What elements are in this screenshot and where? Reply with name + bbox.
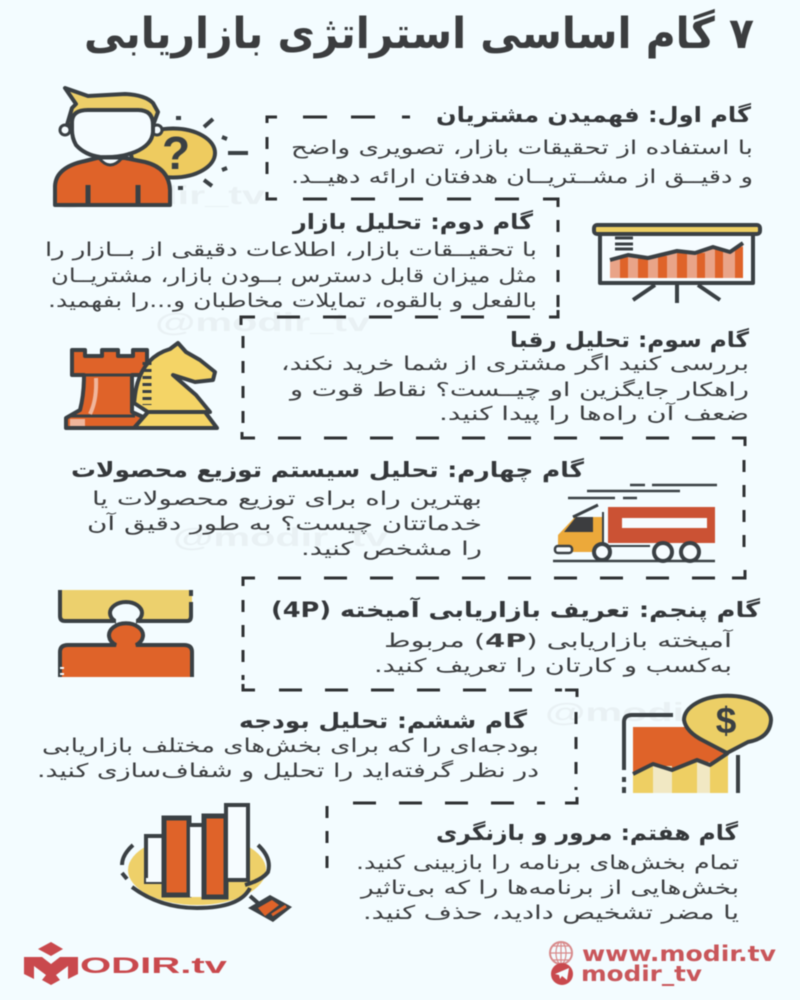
body: step 3: بررسی کنید اگر مشتری از شما خرید نکند،: [281, 352, 749, 375]
body: step 2: با تحقیــقات بازار، اطلاعات دقیقی از بــازار را: [45, 239, 537, 261]
heading: step 1: گام اول: فهمیدن مشتریان: [436, 102, 752, 127]
body: step 3: [281, 352, 749, 425]
body: step 4: بهترین راه برای توزیع محصولات یا: [92, 488, 482, 510]
body: step 1: با استفاده از تحقیقات بازار، تصویری واضح: [291, 137, 753, 159]
icon: magnifier over bar chart: [122, 805, 292, 922]
body: step 5: آمیخته بازاریابی (4P) مربوط: [384, 628, 733, 652]
panel: step 1: [291, 102, 753, 188]
panel: step 7: [356, 820, 739, 924]
heading: step 6: گام ششم: تحلیل بودجه: [239, 708, 528, 733]
icon: dollar bubble and growth chart: $: [716, 700, 737, 741]
body: step 7: بخش‌هایی از برنامه‌ها را که بی‌تاثیر: [360, 877, 739, 899]
icon: dollar bubble and growth chart: [624, 696, 771, 793]
icon: delivery truck: [553, 485, 717, 561]
body: step 6: [37, 735, 539, 782]
contact: telegram: modir_tv: [581, 962, 702, 986]
panel: step 2: [45, 209, 537, 312]
heading: step 7: گام هفتم: مرور و بازنگری: [436, 820, 739, 845]
icon: customer with question mark: [55, 88, 248, 205]
body: step 5: به‌کسب و کارتان را تعریف کنید.: [374, 655, 732, 677]
body: step 3: ضعف آن راه‌ها را پیدا کنید.: [439, 401, 749, 425]
body: step 4: خدماتتان چیست؟ به طور دقیق آن: [87, 511, 482, 535]
watermark: modir_tv third: @modir_tv: [173, 522, 389, 552]
logo: MODIR.tv: [24, 942, 228, 985]
heading: step 5: گام پنجم: تعریف بازاریابی آمیخته (4P): [271, 597, 761, 622]
body: step 3: راهکار جایگزین او چیــست؟ نقاط قوت و: [289, 378, 749, 401]
body: step 5: [374, 628, 733, 677]
icon: customer with question mark: ?: [162, 127, 190, 179]
body: step 6: بودجه‌ای را که برای بخش‌های مختلف بازاریابی: [42, 735, 539, 757]
body: step 2: مثل میزان قابل دسترس بــودن بازار، مشتریــان: [51, 265, 537, 287]
body: step 7: یا مضر تشخیص دادید، حذف کنید.: [363, 902, 739, 924]
panel: step 4: [71, 457, 585, 560]
contact: telegram: [551, 962, 702, 986]
watermark: modir_tv top left: @modir_tv: [50, 180, 266, 210]
heading: step 2: گام دوم: تحلیل بازار: [292, 209, 534, 234]
icon: chess rook and knight: [66, 343, 217, 428]
contact: website: www.modir.tv: [582, 942, 776, 966]
body: step 7: [356, 852, 739, 924]
body: step 2: [45, 239, 537, 312]
body: step 4: [87, 488, 482, 560]
title: ۷ گام اساسی استراتژی بازاریابی: [84, 8, 754, 59]
panel: step 3: [281, 327, 750, 425]
body: step 7: تمام بخش‌های برنامه را بازبینی کنید.: [356, 852, 739, 874]
body: step 1: [291, 137, 753, 188]
icon: presentation board chart: [594, 225, 760, 303]
watermark: modir_tv fourth: @modir_tv: [545, 697, 761, 727]
body: step 4: را مشخص کنید.: [301, 538, 482, 560]
heading: step 3: گام سوم: تحلیل رقبا: [510, 327, 750, 352]
dashed connector frames: [241, 117, 745, 872]
body: step 2: بالفعل و بالقوه، تمایلات مخاطبان و...را بفهمید.: [48, 290, 537, 312]
watermark: modir_tv second: @modir_tv: [155, 307, 371, 337]
heading: step 4: گام چهارم: تحلیل سیستم توزیع محصولات: [71, 457, 585, 482]
body: step 1: و دقیــق از مشــتریــان هدفتان ارائه دهیــد.: [291, 166, 753, 188]
icon: puzzle pieces: [60, 590, 192, 677]
panel: step 6: [37, 708, 539, 782]
panel: step 5: [271, 597, 761, 677]
body: step 6: در نظر گرفته‌اید را تحلیل و شفاف‌سازی کنید.: [37, 759, 539, 782]
logo: MODIR.tv: ODIR.tv: [80, 953, 228, 978]
